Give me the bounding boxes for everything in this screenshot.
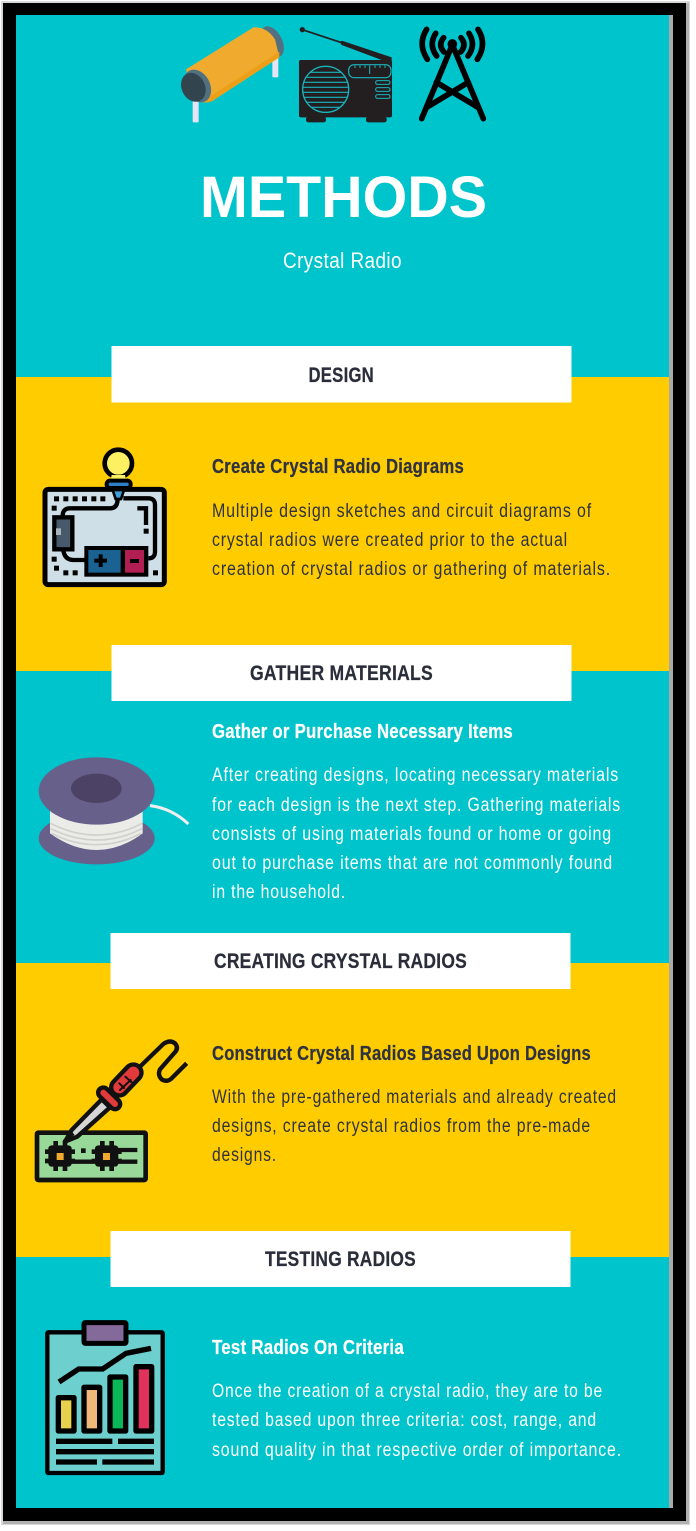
text: creating crystal radios [212, 1042, 617, 1166]
text: gather materials: out to purchase items that are not commonly found [212, 853, 613, 874]
section label: creating crystal radios: CREATING CRYSTAL RADIOS [214, 950, 467, 973]
text: testing radios: Once the creation of a crystal radio, they are to be [212, 1381, 603, 1402]
text: gather materials: for each design is the next step. Gathering materials [212, 795, 621, 816]
icon: soldering iron [37, 1041, 187, 1180]
title: METHODS [200, 165, 487, 230]
text: design: creation of crystal radios or gathering of materials. [212, 559, 611, 580]
icon: radio [299, 27, 392, 122]
panel: testing radios [47, 1231, 622, 1473]
text: testing radios [212, 1336, 622, 1461]
text: gather materials: Gather or Purchase Necessary Items [212, 720, 513, 743]
section label: testing radios: TESTING RADIOS [265, 1248, 416, 1271]
panel: creating crystal radios [37, 933, 617, 1180]
text: creating crystal radios: designs, create crystal radios from the pre-made [212, 1116, 591, 1137]
icon: clipboard chart [47, 1323, 163, 1473]
text: design: crystal radios were created prior to the actual [212, 530, 568, 551]
section label: design [112, 346, 572, 402]
icon: capacitor [176, 22, 289, 122]
text: creating crystal radios: Construct Crystal Radios Based Upon Designs [212, 1042, 591, 1065]
text: gather materials: in the household. [212, 882, 346, 903]
text: design: Create Crystal Radio Diagrams [212, 455, 464, 478]
text: testing radios: Test Radios On Criteria [212, 1336, 404, 1359]
text: testing radios: tested based upon three criteria: cost, range, and [212, 1410, 597, 1431]
section label: design: DESIGN [308, 364, 374, 387]
text: gather materials: After creating designs, locating necessary materials [212, 765, 619, 786]
text: design: Multiple design sketches and circuit diagrams of [212, 501, 592, 522]
icon: radio tower [422, 29, 483, 119]
section label: gather materials [112, 645, 572, 701]
header icons [176, 22, 483, 122]
text: testing radios: sound quality in that respective order of importance. [212, 1440, 622, 1461]
icon: circuit board with bulb [45, 450, 164, 585]
panel: gather materials [39, 645, 621, 903]
text: creating crystal radios: designs. [212, 1145, 277, 1166]
section label: gather materials: GATHER MATERIALS [250, 662, 433, 685]
text: gather materials [212, 720, 621, 903]
text: gather materials: consists of using materials found or home or going [212, 824, 612, 845]
soldering iron handle [103, 1073, 133, 1104]
panel: design [45, 346, 611, 585]
icon: wire spool [39, 757, 188, 864]
text: creating crystal radios: With the pre-gathered materials and already created [212, 1087, 617, 1108]
subtitle: Crystal Radio [283, 248, 402, 273]
text: design [212, 455, 611, 580]
section label: testing radios [110, 1231, 570, 1287]
section label: creating crystal radios [110, 933, 570, 989]
